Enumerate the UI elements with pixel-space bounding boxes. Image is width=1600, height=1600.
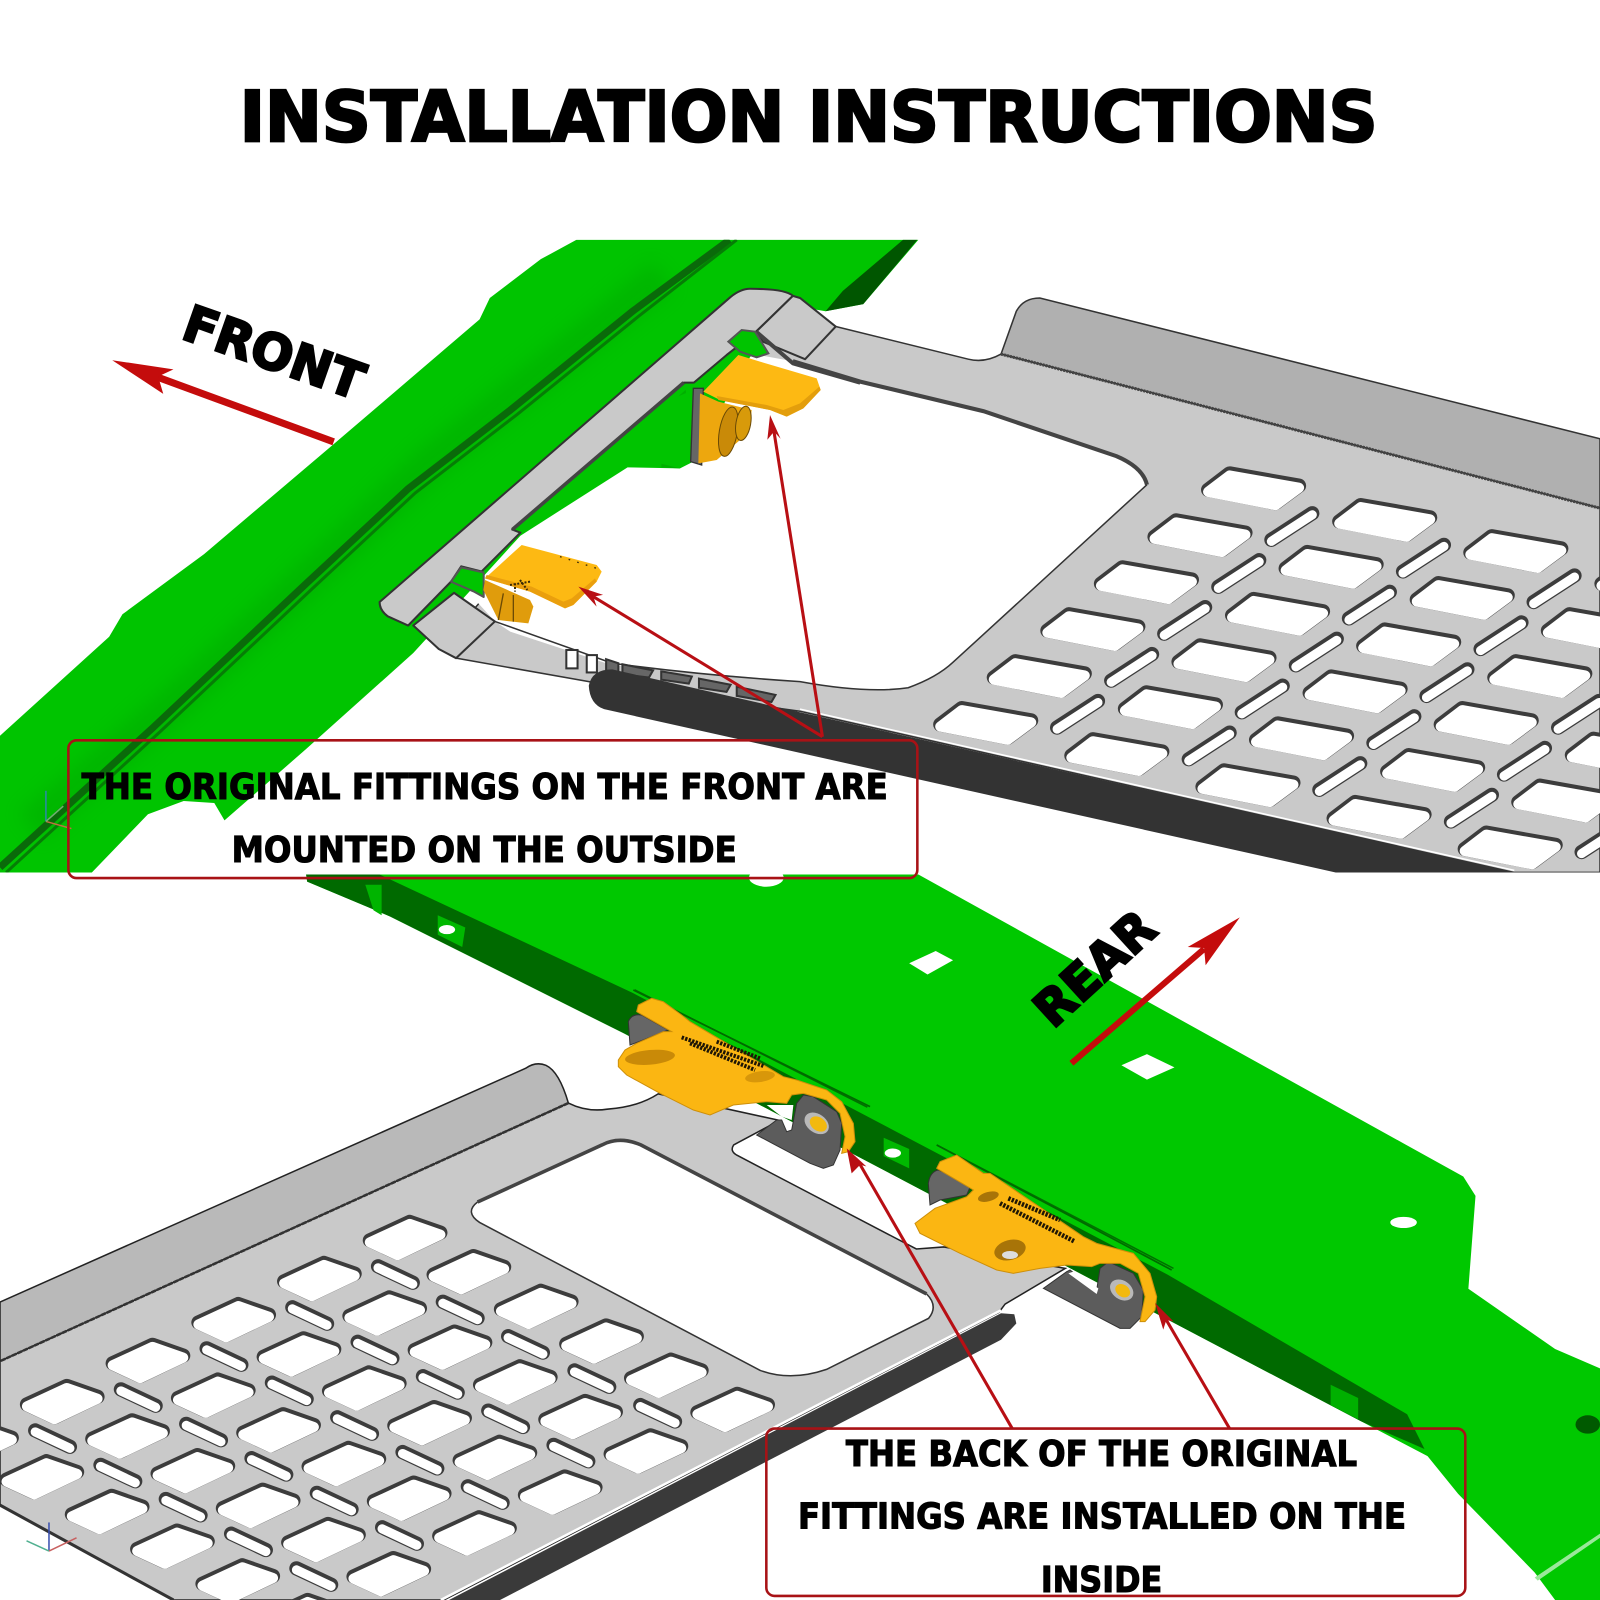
fitting: left rear bracket [618, 990, 870, 1168]
arrow: front direction [112, 360, 334, 442]
arrow: pointer to right rear fitting [1155, 1303, 1230, 1429]
callout: front fittings: THE ORIGINAL FITTINGS ON THE FRONT ARE [82, 767, 888, 808]
grey mounting frame [380, 289, 860, 658]
perforated grey plate [0, 1064, 1065, 1600]
large opening [471, 1140, 933, 1376]
arrow: pointer to left rear fitting [847, 1148, 1012, 1429]
green front rail [0, 240, 918, 872]
plate holes [0, 1222, 768, 1600]
callout: rear fittings: THE BACK OF THE ORIGINAL [846, 1434, 1357, 1475]
plate holes [940, 473, 1600, 864]
callout: front fittings: MOUNTED ON THE OUTSIDE [232, 830, 737, 871]
callout: rear fittings: INSIDE [1041, 1560, 1162, 1600]
title: INSTALLATION INSTRUCTIONS [240, 78, 1378, 158]
callout: rear fittings: FITTINGS ARE INSTALLED ON THE [798, 1497, 1406, 1538]
panel: front view [0, 240, 1600, 872]
icon: axis triad [46, 791, 71, 829]
green rear rail [306, 868, 1600, 1600]
dark rubber strip [449, 1313, 1016, 1600]
label: REAR: REAR [1023, 899, 1167, 1038]
callout: rear fittings [766, 1429, 1465, 1600]
icon: axis triad [27, 1522, 77, 1551]
large opening [449, 347, 1147, 690]
fitting: upper yellow bracket [660, 330, 821, 468]
fitting: right rear bracket [915, 1145, 1172, 1328]
arrow: pointer to upper front fitting [767, 415, 822, 737]
dark rubber strip [589, 669, 1514, 872]
arrow: rear direction [1071, 917, 1240, 1063]
panel: rear view [0, 868, 1600, 1600]
arrow: pointer to lower front fitting [578, 587, 822, 737]
callout: front fittings [68, 740, 917, 878]
label: FRONT: FRONT [176, 294, 372, 411]
fitting: lower yellow bracket [483, 545, 602, 623]
perforated grey plate [439, 298, 1600, 872]
small arm cut-outs [566, 650, 776, 702]
